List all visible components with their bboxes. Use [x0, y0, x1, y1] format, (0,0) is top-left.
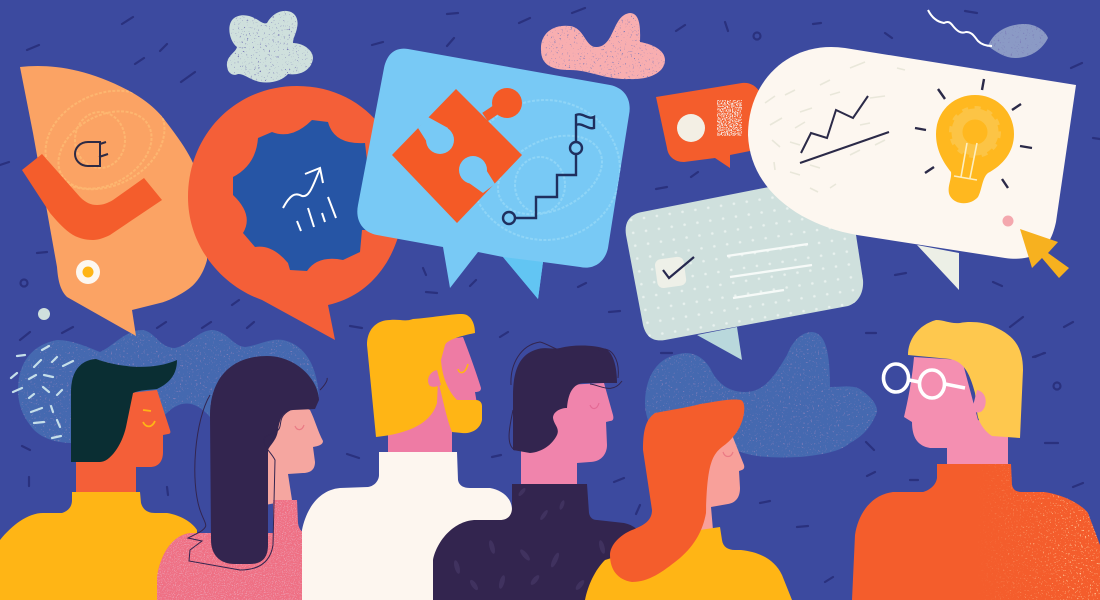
scribble [470, 100, 620, 240]
person: man with dark sweater [433, 342, 645, 600]
blob: pink cloud [541, 13, 665, 79]
blob: right blue cloud [645, 332, 877, 457]
check icon [654, 256, 694, 289]
hair [71, 359, 177, 462]
scribble [44, 90, 166, 190]
text lines [727, 244, 812, 298]
ear [700, 469, 714, 483]
person: woman with pink sweater [157, 356, 365, 600]
panel: red circular speech bubble with gear [188, 86, 404, 340]
left blob confetti [11, 346, 73, 438]
second tail [503, 257, 543, 299]
neck and face [695, 430, 744, 530]
target dot [76, 260, 100, 284]
sweater leaf pattern [453, 487, 606, 591]
eye [723, 452, 733, 456]
hair [513, 345, 617, 453]
plug icon [75, 142, 108, 166]
neck and face [521, 383, 613, 488]
panel: white speech bubble with chart and light bulb [748, 47, 1076, 290]
sweater [302, 452, 512, 600]
pink dot [1002, 216, 1014, 226]
light dot [38, 308, 50, 320]
stairs path with flag [503, 114, 594, 224]
panel: light green speech bubble [626, 172, 863, 360]
eye [458, 364, 468, 373]
sweater [433, 484, 645, 600]
sweater [585, 527, 792, 600]
speckled patch [717, 100, 742, 136]
person: bearded man with white sweater [302, 314, 512, 600]
person: man with yellow sweater [0, 359, 197, 600]
hair and beard [367, 314, 482, 437]
growth chart icon [283, 168, 336, 231]
panel: peach speech bubble with plug icon [20, 66, 207, 336]
light bulb icon [915, 79, 1032, 203]
sweater speckle [984, 464, 1100, 600]
neck and face [388, 337, 481, 456]
hair outline [509, 342, 622, 450]
neck and face [904, 357, 1008, 468]
panel: small red speech bubble [656, 83, 765, 168]
line chart icon [800, 96, 889, 163]
hair [908, 320, 1023, 438]
hair outline [188, 378, 327, 570]
bubble tail [697, 327, 742, 360]
person: man with glasses and orange sweater [850, 320, 1100, 600]
puzzle piece [392, 88, 522, 223]
white dot [677, 114, 705, 142]
sweater [852, 464, 1100, 600]
person: woman with red hair [585, 399, 792, 600]
blob: grey leaf with squiggle [928, 10, 1048, 58]
panel: blue speech bubble with puzzle and stairs [357, 49, 630, 299]
neck and face [265, 405, 323, 505]
sweater [0, 492, 197, 600]
hatch texture [765, 62, 905, 192]
ear [111, 421, 123, 433]
glasses [884, 364, 965, 398]
ear [972, 390, 986, 413]
eye [590, 403, 599, 409]
eye [295, 425, 304, 430]
hair [610, 399, 744, 582]
bubble tail [917, 245, 959, 290]
neck and face [76, 390, 170, 495]
ear [428, 370, 441, 387]
sweater [157, 500, 365, 600]
red band [22, 154, 162, 240]
cursor arrow [1020, 229, 1069, 278]
blue gear [233, 120, 375, 271]
eye [143, 410, 155, 426]
hair [210, 356, 319, 564]
blob: left blue cloud [18, 330, 319, 445]
blob: grey green cloud [227, 11, 313, 83]
